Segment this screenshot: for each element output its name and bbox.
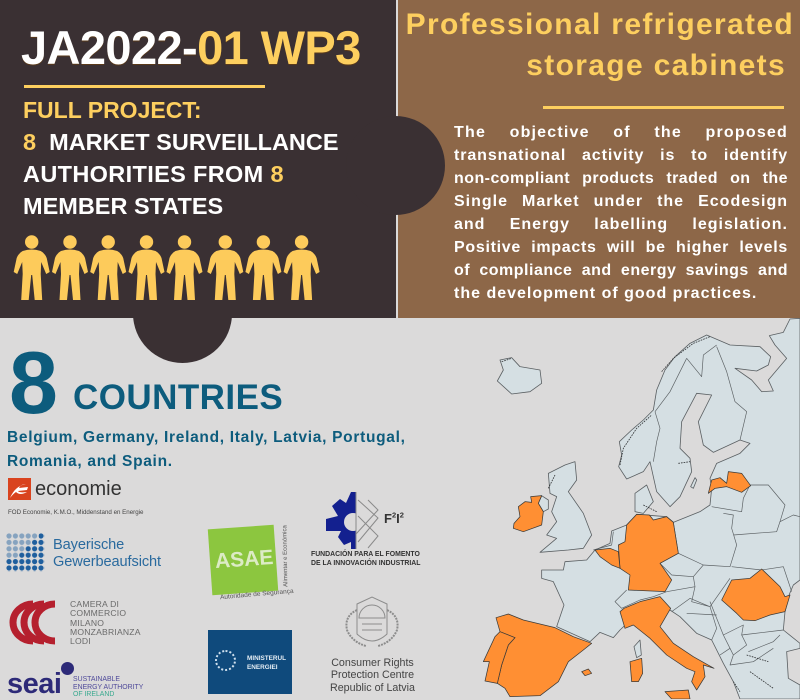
text: full project: FULL PROJECT: (23, 97, 201, 123)
text: objective: the development of good practices. (454, 285, 757, 302)
Portugal (483, 632, 515, 683)
map of Europe (483, 318, 800, 699)
big number and heading: 8 countries: 8 (9, 333, 58, 432)
text: country list: Belgium, Germany, Ireland, Italy, Latvia, Portugal, (7, 429, 406, 446)
text: objective: The objective of the proposed (454, 124, 788, 141)
logo: Ministerul Energiei: MINISTERUL (247, 655, 286, 662)
text: objective: transnational activity is to identify (454, 147, 788, 164)
logo: Ministerul Energiei (208, 630, 292, 694)
logo: F2I2: DE LA INNOVACIÓN INDUSTRIAL (311, 560, 420, 567)
Ireland (513, 496, 543, 532)
coast detail (502, 337, 773, 692)
logo: seai (7, 662, 144, 700)
logo: Ministerul Energiei: ENERGIEI (247, 664, 278, 671)
text: objective: and Energy labelling legislation. (454, 216, 788, 233)
logo: ASAE (208, 524, 294, 601)
logo: economie: economie (35, 478, 122, 500)
Northern Ireland (538, 496, 548, 512)
background: lower section (0, 318, 800, 699)
logo: seai: seai (7, 668, 61, 700)
UK (540, 462, 592, 552)
logo: Camera di Commercio: MILANO (70, 618, 104, 628)
logo: economie (8, 478, 144, 516)
circle notch bottom (133, 318, 232, 363)
heading: product (406, 8, 794, 82)
Balearic (582, 669, 592, 676)
icons: eight people (14, 235, 320, 300)
Latvia (708, 472, 751, 493)
heading: product: Professional refrigerated (406, 8, 794, 41)
Sardinia (630, 658, 643, 682)
Sicily (665, 690, 690, 699)
Gotland (691, 478, 697, 488)
text: full project (23, 97, 339, 219)
logo: Camera di Commercio: LODI (70, 636, 91, 646)
text: objective: Single Market under the Ecodesign (454, 193, 788, 210)
circle notch right (346, 116, 445, 215)
logo: Bayerische Gewerbeaufsicht: Gewerbeaufsicht (53, 554, 161, 570)
panel: project summary (0, 0, 396, 318)
text: objective: of compliance and energy savings and (454, 262, 788, 279)
heading: product: storage cabinets (526, 49, 786, 82)
text: objective (454, 124, 788, 302)
title: JA2022-01 WP3 (21, 21, 361, 74)
Spain (496, 614, 592, 697)
Belgium (595, 548, 620, 568)
logo: Bayerische Gewerbeaufsicht (6, 533, 161, 572)
logo: F2I2: FUNDACIÓN PARA EL FOMENTO (311, 551, 420, 558)
logo: F2I2: F2I2 (384, 511, 404, 526)
panel: objective (398, 0, 800, 318)
text: objective: Positive impacts will be higher levels (454, 239, 788, 256)
logo: Camera di Commercio: CAMERA DI (70, 599, 119, 609)
text: full project: MEMBER STATES (23, 193, 223, 219)
big number and heading: 8 countries: COUNTRIES (73, 378, 283, 417)
Corsica (634, 640, 641, 658)
logo: Consumer Rights Protection Centre: Consumer Rights (331, 657, 414, 669)
divider under heading (543, 106, 784, 109)
logo: Camera di Commercio (10, 599, 141, 646)
logo: seai: OF IRELAND (73, 691, 114, 698)
logo: Bayerische Gewerbeaufsicht: Bayerische (53, 537, 124, 553)
logo: seai: SUSTAINABLE (73, 676, 120, 683)
Romania (722, 569, 790, 621)
text: full project: 8 MARKET SURVEILLANCE (23, 129, 339, 155)
big number and heading: 8 countries (9, 333, 283, 432)
text: country list: Romania, and Spain. (7, 452, 173, 470)
logo: Camera di Commercio: COMMERCIO (70, 608, 126, 618)
text: objective: non-compliant products traded on the (454, 170, 788, 187)
logo: Consumer Rights Protection Centre: Republic of Latvia (330, 682, 415, 694)
logo: ASAE: Alimentar e Económica (282, 525, 289, 587)
logo: F2I2 (311, 492, 420, 567)
logo: economie: FOD Economie, K.M.O., Middenstand en Energie (8, 509, 144, 516)
logo: Consumer Rights Protection Centre: Protection Centre (331, 669, 414, 681)
logo: Consumer Rights Protection Centre (330, 596, 415, 694)
logo: seai: ENERGY AUTHORITY (73, 684, 143, 691)
Germany (618, 514, 678, 592)
Iceland (497, 358, 542, 394)
logo: ASAE: ASAE (214, 546, 274, 573)
text: full project: AUTHORITIES FROM 8 (23, 161, 284, 187)
Denmark (635, 485, 653, 513)
divider under title (24, 85, 265, 88)
logo: ASAE: Autoridade de Segurança (220, 588, 294, 601)
text: country list (7, 429, 406, 470)
logo: Camera di Commercio: MONZABRIANZA (70, 627, 141, 637)
Italy (620, 597, 714, 690)
